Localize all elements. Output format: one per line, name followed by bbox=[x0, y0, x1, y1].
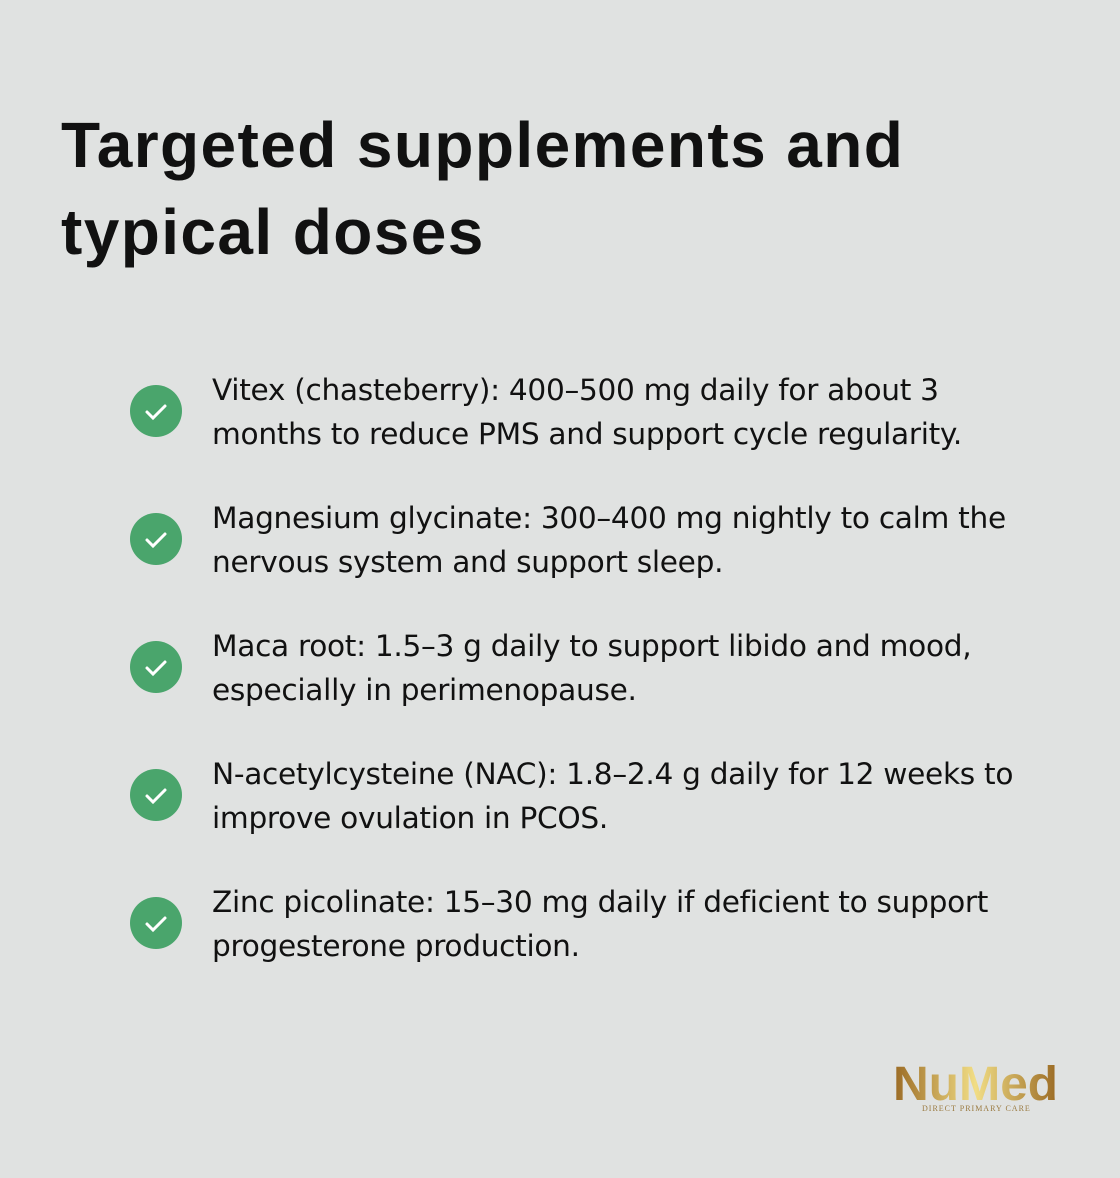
text bbox=[212, 629, 971, 707]
icon: check bbox=[130, 641, 182, 693]
icon: check bbox=[130, 385, 182, 437]
icon: check bbox=[130, 897, 182, 949]
logo: NuMed bbox=[893, 1058, 1058, 1111]
text: improve ovulation in PCOS. bbox=[212, 801, 608, 835]
text: especially in perimenopause. bbox=[212, 673, 637, 707]
text bbox=[212, 373, 962, 451]
text: Zinc picolinate: 15–30 mg daily if deficient to support bbox=[212, 885, 988, 919]
text bbox=[212, 501, 1006, 579]
text: Vitex (chasteberry): 400–500 mg daily for about 3 bbox=[212, 373, 939, 407]
text bbox=[212, 757, 1013, 835]
item: NAC bbox=[130, 757, 1013, 835]
title: Targeted supplements and bbox=[61, 109, 904, 181]
icon: check bbox=[130, 513, 182, 565]
text: months to reduce PMS and support cycle regularity. bbox=[212, 417, 962, 451]
logo: DIRECT PRIMARY CARE bbox=[922, 1104, 1031, 1113]
item: zinc bbox=[130, 885, 988, 963]
title bbox=[61, 109, 904, 268]
text: Magnesium glycinate: 300–400 mg nightly to calm the bbox=[212, 501, 1006, 535]
item: maca bbox=[130, 629, 971, 707]
title: typical doses bbox=[61, 196, 485, 268]
item: magnesium bbox=[130, 501, 1006, 579]
text: N-acetylcysteine (NAC): 1.8–2.4 g daily for 12 weeks to bbox=[212, 757, 1013, 791]
text: progesterone production. bbox=[212, 929, 580, 963]
text: Maca root: 1.5–3 g daily to support libido and mood, bbox=[212, 629, 971, 663]
text: nervous system and support sleep. bbox=[212, 545, 723, 579]
text bbox=[212, 885, 988, 963]
item: vitex bbox=[130, 373, 962, 451]
icon: check bbox=[130, 769, 182, 821]
